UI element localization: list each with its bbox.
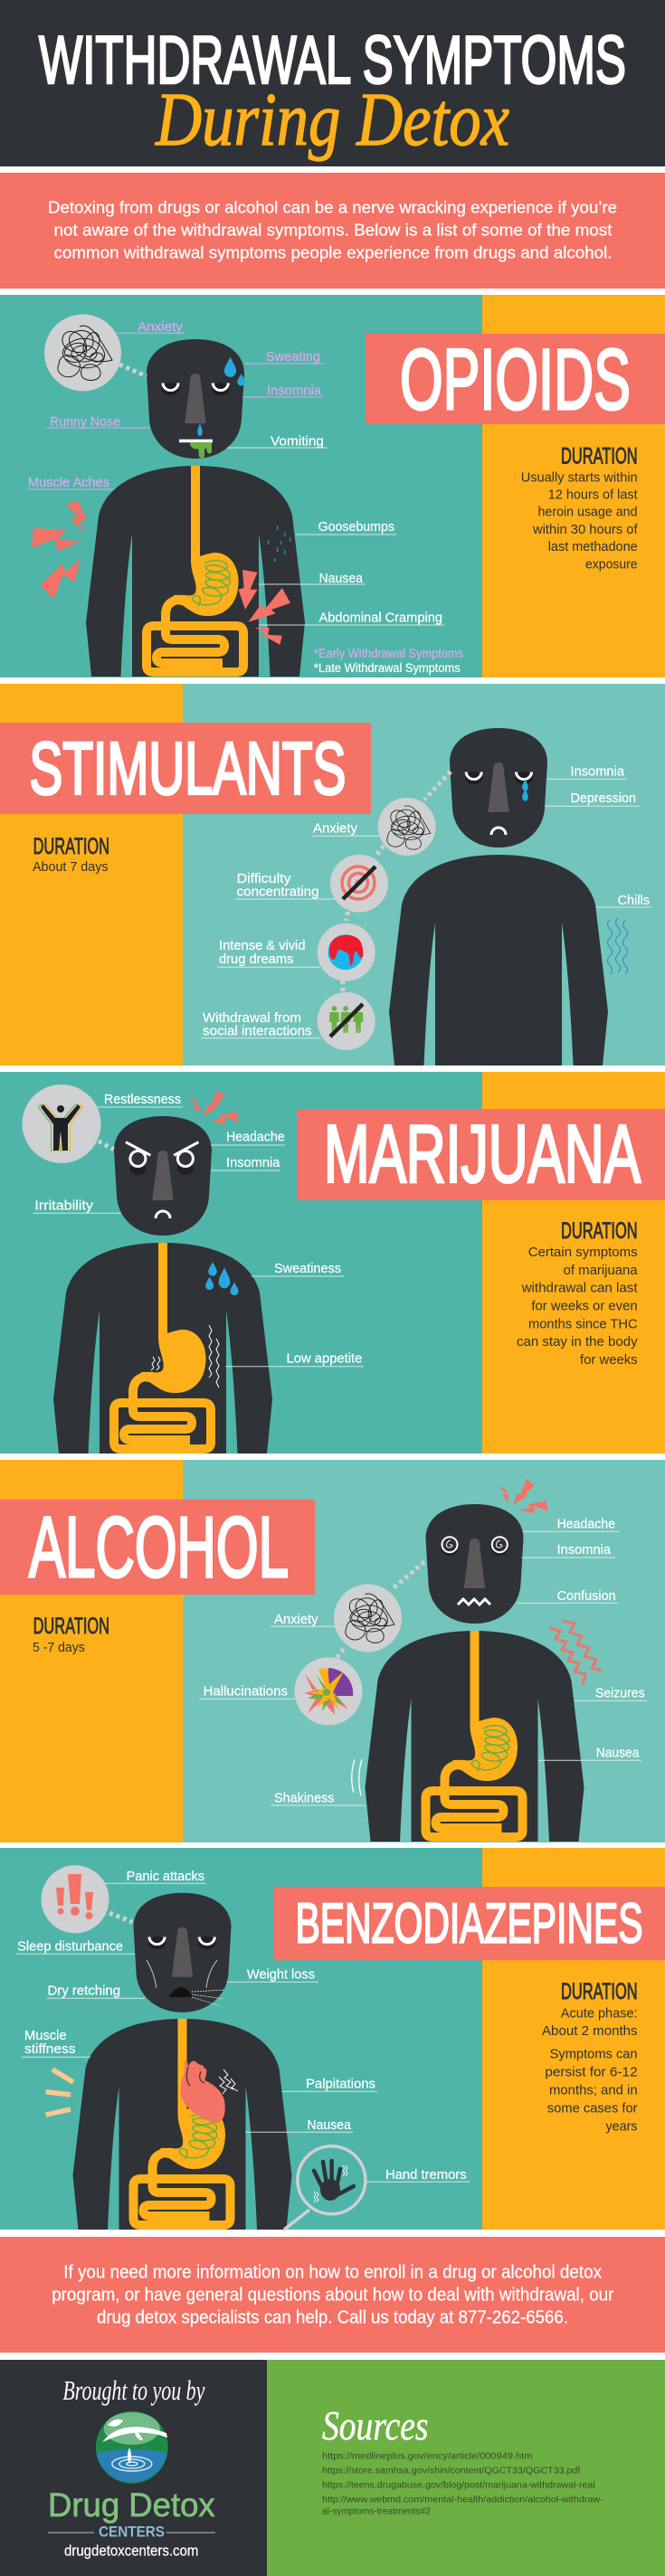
duration: opioids: last methadone: [548, 539, 638, 554]
panel: opioids: [0, 295, 665, 677]
label: sweating: [244, 350, 323, 365]
heading: alcohol: ALCOHOL: [29, 1500, 289, 1596]
label: vomiting: Vomiting: [271, 435, 324, 450]
icon: sweat drops: [197, 356, 245, 436]
duration: marijuana: for weeks: [580, 1352, 638, 1368]
sources heading: Sources: [322, 2402, 429, 2448]
duration: marijuana: can stay in the body: [517, 1334, 638, 1350]
logo wordmark: [48, 2486, 215, 2540]
label: anxiety: Anxiety: [274, 1613, 318, 1627]
label: drug dreams: Intense & vivid: [219, 939, 306, 953]
label: abdominal cramping: Abdominal Cramping: [318, 611, 442, 626]
duration: opioids: Usually starts within: [521, 469, 638, 485]
icon: target crossed out: [330, 855, 388, 913]
label: insomnia: [242, 384, 323, 399]
duration: marijuana: Certain symptoms: [528, 1245, 638, 1260]
duration: marijuana: for weeks or even: [531, 1299, 638, 1314]
call to action text: program, or have general questions about how to deal with withdrawal, our: [52, 2285, 614, 2305]
duration: benzodiazepines: [542, 1979, 638, 2134]
icon: restlessness bubble: [22, 1084, 114, 1163]
label: anxiety: [271, 1613, 335, 1627]
label: hallucinations: Hallucinations: [204, 1685, 288, 1700]
label: insomnia: Insomnia: [570, 765, 625, 780]
label: nausea: [259, 572, 366, 586]
icon: cramp bolts: [239, 570, 290, 645]
label: headache: [523, 1517, 619, 1531]
label: social withdrawal: social interactions: [203, 1025, 312, 1039]
label: shakiness: Shakiness: [274, 1791, 334, 1805]
duration: stimulants: [33, 834, 109, 875]
duration: opioids: heroin usage and: [537, 505, 637, 520]
label: irritability: [33, 1198, 121, 1213]
duration: marijuana: [517, 1218, 638, 1368]
heading: stimulants: [0, 723, 371, 814]
icon: dream globe: [318, 923, 375, 981]
label: confusion: Confusion: [557, 1589, 616, 1604]
panel: benzodiazepines: [0, 1848, 665, 2230]
icon: spiral eyes: [441, 1537, 508, 1556]
icon: heart: [181, 2060, 225, 2123]
icon: chills waves: [608, 918, 628, 974]
panel: marijuana: [0, 1072, 665, 1454]
label: panic attacks: Panic attacks: [127, 1870, 204, 1884]
icon: shakiness lines: [352, 1759, 362, 1795]
label: nausea: Nausea: [318, 572, 364, 586]
logo wordmark: CENTERS: [99, 2523, 165, 2540]
label: anxiety: Anxiety: [313, 822, 358, 837]
icon: headache bolts: [189, 1090, 239, 1124]
brought to you by: Brought to you by: [62, 2374, 205, 2406]
label: nausea: Nausea: [307, 2118, 352, 2133]
duration: benzodiazepines: Acute phase:: [561, 2006, 638, 2022]
icon: angry eyes: [126, 1142, 198, 1175]
label: nausea: [537, 1746, 641, 1760]
icon: hallucination burst: [295, 1657, 362, 1725]
duration: marijuana: of marijuana: [564, 1263, 638, 1278]
call to action text: [52, 2262, 614, 2327]
label: sweatiness: Sweatiness: [274, 1262, 341, 1276]
duration: marijuana: withdrawal can last: [521, 1281, 638, 1296]
label: weight loss: Weight loss: [247, 1968, 315, 1983]
label: muscle stiffness: [21, 2029, 90, 2057]
icon: sweat drops: [205, 1262, 239, 1295]
website: drugdetoxcenters.com: [64, 2543, 198, 2560]
icon: anxiety bubble: [378, 798, 436, 856]
label: runny nose: Runny Nose: [50, 415, 120, 430]
icon: goosebumps: [268, 526, 290, 562]
call to action text: If you need more information on how to enroll in a drug or alcohol detox: [63, 2262, 602, 2282]
footer: sponsor panel: [0, 2360, 267, 2576]
heading: stimulants: STIMULANTS: [29, 727, 346, 810]
footer: sources panel: [267, 2360, 665, 2576]
figure: opioids person: [86, 339, 305, 677]
icon: hand tremor magnifier: [284, 2146, 366, 2230]
duration: benzodiazepines: Symptoms can: [550, 2046, 638, 2061]
figure: marijuana person: [53, 1116, 272, 1454]
intro text: not aware of the withdrawal symptoms. Below is a list of some of the most: [54, 222, 612, 240]
icon: people crossed out: [318, 992, 375, 1050]
header: [0, 0, 665, 166]
duration: alcohol: 5 -7 days: [33, 1640, 85, 1655]
sources list: https://teens.drugabuse.gov/blog/post/marijuana-withdrawal-real: [322, 2480, 595, 2491]
label: headache: Headache: [557, 1517, 615, 1531]
label: shakiness: [271, 1791, 366, 1805]
label: drug dreams: drug dreams: [219, 952, 293, 967]
heading: alcohol: [0, 1500, 315, 1596]
call to action text: drug detox specialists can help. Call us today at 877-262-6566.: [97, 2307, 568, 2327]
label: sweating: Sweating: [266, 350, 320, 365]
panel: stimulants: [0, 684, 665, 1065]
label: nausea: [245, 2118, 353, 2133]
icon: palpitation zigzags: [219, 2069, 238, 2094]
label: muscle aches: Muscle Aches: [28, 476, 109, 490]
label: muscle stiffness: stiffness: [24, 2042, 76, 2057]
legend: [314, 647, 463, 675]
label: chills: [596, 894, 652, 908]
duration: benzodiazepines: About 2 months: [542, 2023, 638, 2039]
label: social withdrawal: Withdrawal from: [203, 1011, 301, 1026]
duration: stimulants: About 7 days: [33, 859, 109, 875]
duration: benzodiazepines: some cases for: [547, 2100, 638, 2116]
duration: benzodiazepines: years: [606, 2118, 638, 2134]
label: palpitations: Palpitations: [306, 2077, 375, 2091]
figure: alcohol person: [366, 1504, 584, 1842]
intro panel: [0, 173, 665, 289]
figure: benzodiazepines person: [72, 1893, 291, 2230]
icon: panic bubble: [42, 1865, 132, 1933]
legend: *Early Withdrawal Symptoms: [314, 647, 463, 660]
label: insomnia: Insomnia: [226, 1156, 280, 1170]
label: depression: Depression: [570, 791, 636, 806]
label: muscle stiffness: Muscle: [24, 2029, 67, 2043]
label: insomnia: Insomnia: [557, 1543, 612, 1558]
label: nausea: Nausea: [596, 1746, 640, 1760]
label: restlessness: Restlessness: [104, 1093, 181, 1107]
label: insomnia: [547, 765, 627, 780]
icon: seizure zigzags: [549, 1621, 602, 1685]
legend: *Late Withdrawal Symptoms: [314, 661, 461, 675]
label: confusion: [517, 1589, 618, 1604]
connector dots: [337, 1562, 424, 1658]
duration: stimulants: DURATION: [33, 834, 109, 859]
label: anxiety: [312, 822, 380, 837]
label: insomnia: [522, 1543, 615, 1558]
icon: anxiety bubble: [44, 315, 147, 391]
label: drug dreams: [217, 939, 320, 967]
sources list: [322, 2450, 603, 2516]
label: goosebumps: Goosebumps: [318, 520, 394, 535]
sources list: http://www.webmd.com/mental-health/addiction/alcohol-withdraw-: [322, 2495, 603, 2505]
label: irritability: Irritability: [34, 1198, 94, 1213]
logo mark: [96, 2411, 168, 2484]
label: vomiting: [227, 435, 328, 450]
intro text: common withdrawal symptoms people experience from drugs and alcohol.: [54, 244, 612, 262]
intro text: Detoxing from drugs or alcohol can be a nerve wracking experience if you’re: [48, 199, 617, 217]
duration: benzodiazepines: months; and in: [549, 2082, 638, 2098]
intro text: [48, 199, 617, 262]
icon: anxiety bubble: [334, 1585, 402, 1652]
sources list: https://store.samhsa.gov/shin/content/QGCT33/QGCT33.pdf: [322, 2465, 580, 2476]
duration: marijuana: months since THC: [528, 1317, 638, 1332]
label: dry retching: Dry retching: [47, 1984, 120, 1998]
logo wordmark: Drug Detox: [48, 2486, 215, 2524]
label: runny nose: [47, 415, 150, 430]
label: difficulty concentrating: Difficulty: [237, 872, 291, 886]
duration: alcohol: DURATION: [33, 1614, 109, 1639]
sources list: al-symptoms-treatments#2: [322, 2505, 431, 2516]
icon: muscle ache bolts: [32, 500, 87, 599]
icon: muscle stiffness marks: [46, 2069, 73, 2115]
icon: stomach ache squiggles: [151, 1325, 219, 1387]
label: seizures: Seizures: [595, 1687, 645, 1701]
label: difficulty concentrating: [235, 872, 335, 900]
duration: opioids: exposure: [585, 557, 638, 573]
label: depression: [545, 791, 639, 806]
connector dots: [343, 772, 451, 992]
duration: opioids: 12 hours of last: [548, 487, 639, 502]
label: anxiety: [116, 320, 185, 335]
label: chills: Chills: [618, 894, 650, 908]
icon: headache bolts: [499, 1479, 548, 1513]
label: sleep disturbance: Sleep disturbance: [17, 1939, 123, 1954]
label: low appetite: Low appetite: [286, 1352, 362, 1367]
label: hand tremors: Hand tremors: [385, 2168, 467, 2183]
icon: dry retching mouth: [168, 1987, 224, 2006]
sources list: https://medlineplus.gov/ency/article/000949.htm: [322, 2450, 533, 2461]
duration: opioids: within 30 hours of: [532, 522, 638, 537]
duration: benzodiazepines: persist for 6-12: [545, 2064, 638, 2079]
icon: vomit mouth: [179, 440, 213, 458]
label: headache: Headache: [226, 1131, 285, 1145]
label: social withdrawal: [201, 1011, 320, 1039]
duration: opioids: [521, 444, 639, 573]
panel: alcohol: [0, 1460, 665, 1842]
duration: alcohol: [33, 1614, 109, 1655]
call to action panel: [0, 2237, 665, 2353]
label: anxiety: Anxiety: [138, 320, 184, 335]
subtitle: During Detox: [155, 78, 509, 162]
label: insomnia: Insomnia: [267, 384, 322, 399]
label: difficulty concentrating: concentrating: [237, 886, 318, 900]
figure: stimulants person: [389, 728, 608, 1065]
